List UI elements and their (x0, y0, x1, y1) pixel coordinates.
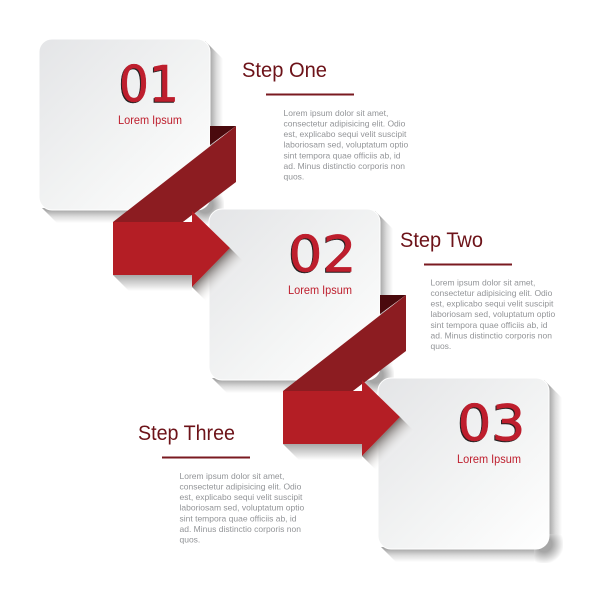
ribbon arrow 1 (113, 126, 246, 303)
label: Lorem Ipsum 2: Lorem Ipsum (288, 283, 352, 297)
label: Lorem Ipsum 1: Lorem Ipsum (118, 113, 182, 127)
number 03: 03 (458, 394, 526, 452)
text block: Step Two: est, explicabo sequi velit suscipit (430, 299, 554, 309)
text block: Step Three: ad. Minus distinctio corporis non (180, 524, 301, 534)
heading: Step One: Step One (242, 59, 327, 82)
text block: Step One: est, explicabo sequi velit suscipit (284, 129, 407, 139)
heading: Step Three: Step Three (138, 422, 235, 445)
number 01: 01 (119, 56, 179, 114)
text block: Step Two: Lorem ipsum dolor sit amet, (430, 278, 535, 288)
number 02: 02 (288, 226, 356, 284)
text block: Step Three: laboriosam sed, voluptatum optio (180, 503, 305, 513)
label: Lorem Ipsum 3: Lorem Ipsum (457, 452, 521, 466)
text block: Step One: quos. (284, 171, 304, 181)
panel: step 2 card (209, 209, 394, 394)
number 03: 03 (456, 396, 524, 454)
number 01: 01 (118, 56, 178, 114)
text block: Step Two: ad. Minus distinctio corporis non (430, 330, 552, 340)
text block: Step One: consectetur adipisicing elit. Odio (284, 118, 406, 128)
rule: Step Two (424, 264, 512, 266)
text block: Step One: laboriosam sed, voluptatum optio (284, 140, 409, 150)
text block: Step Two: consectetur adipisicing elit. Odio (430, 288, 553, 298)
text block: Step One: ad. Minus distinctio corporis non (284, 161, 405, 171)
text block: Step Three: Lorem ipsum dolor sit amet, (180, 471, 284, 481)
text block: Step Three: est, explicabo sequi velit suscipit (180, 492, 303, 502)
text block: Step Three: sint tempora quae officiis ab, id (180, 513, 297, 523)
ribbon arrow 2 (283, 295, 416, 472)
text block: Step Two: laboriosam sed, voluptatum optio (430, 309, 556, 319)
text block: Step Three: quos. (180, 534, 200, 544)
heading: Step Two: Step Two (400, 229, 483, 252)
text block: Step Three: consectetur adipisicing elit. Odio (180, 482, 302, 492)
rule: Step Three (162, 456, 250, 458)
text block: Step One: Lorem ipsum dolor sit amet, (284, 108, 388, 118)
text block: Step Two: quos. (430, 341, 451, 351)
text block: Step Two: sint tempora quae officiis ab, id (430, 320, 548, 330)
rule: Step One (266, 94, 354, 96)
panel: step 1 card (39, 39, 224, 224)
number 02: 02 (288, 226, 356, 284)
text block: Step One: sint tempora quae officiis ab, id (284, 150, 401, 160)
panel: step 3 card (378, 378, 563, 563)
